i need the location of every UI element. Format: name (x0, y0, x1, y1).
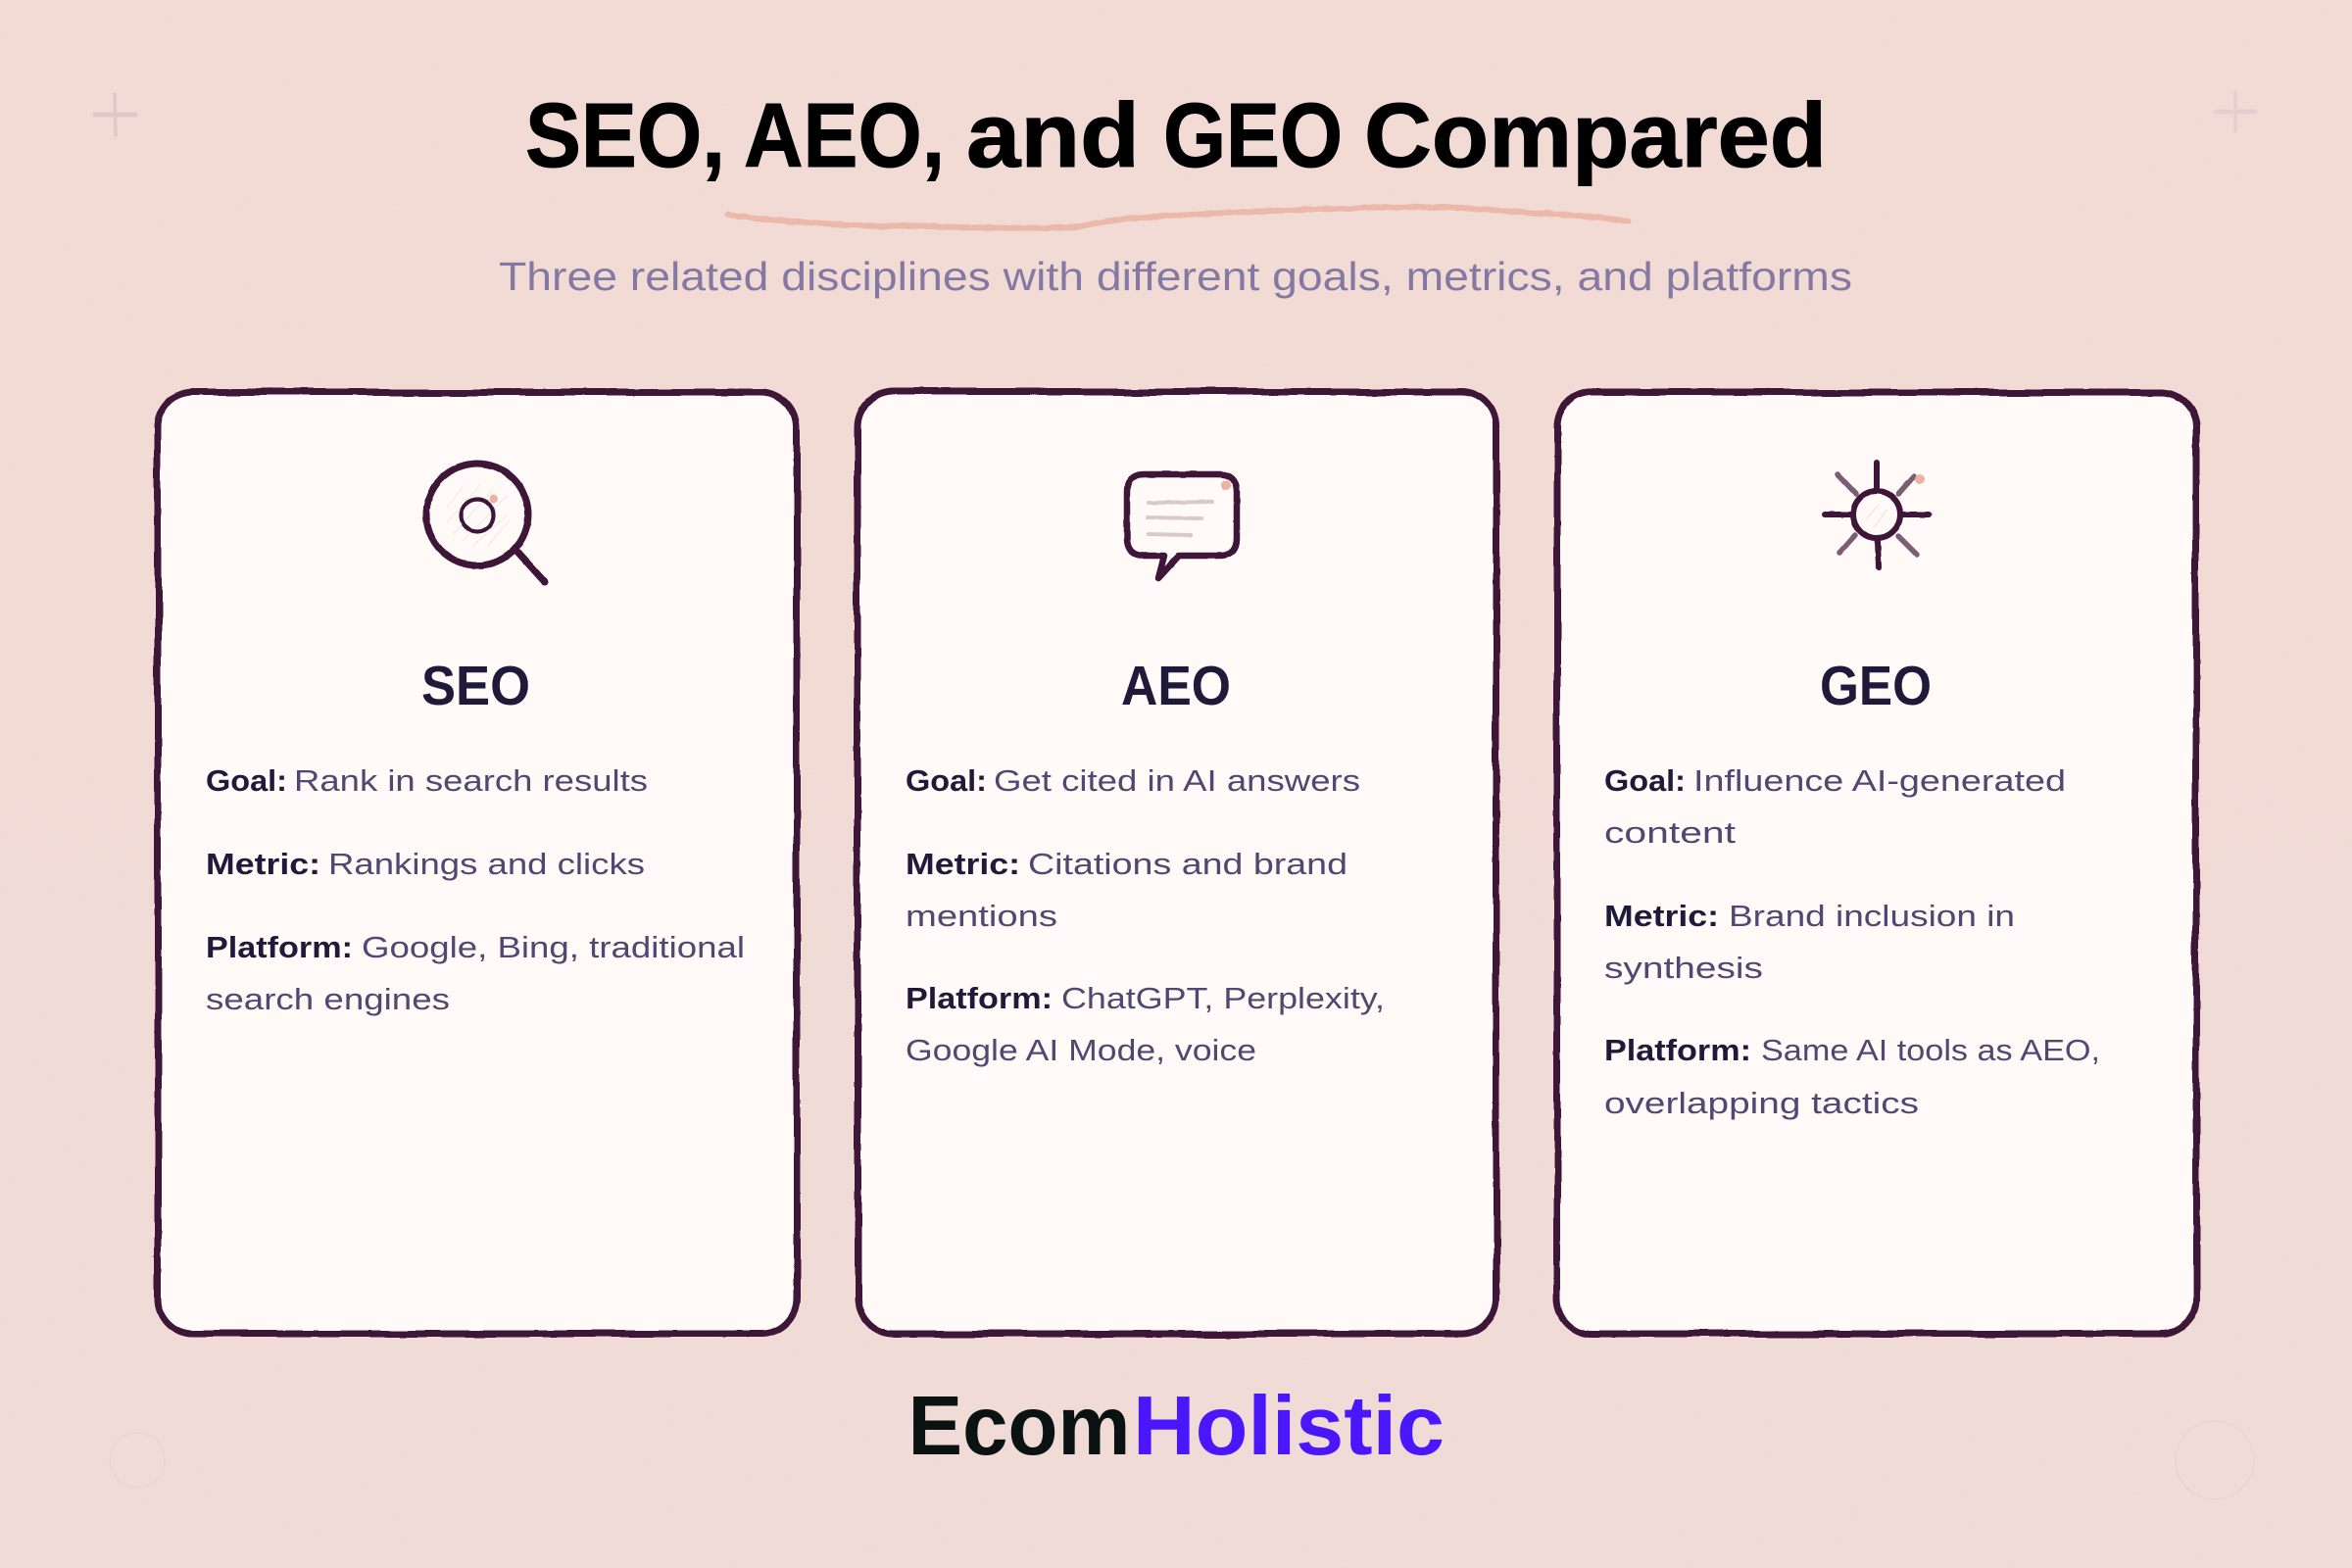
metric: SEO: Rankings and clicks (328, 847, 645, 881)
card outline: GEO (1557, 392, 2196, 1334)
metric: GEO (1604, 899, 2015, 985)
platform: AEO (906, 981, 1385, 1067)
goal: SEO: Goal: (206, 763, 287, 798)
goal: GEO: Influence AI-generated (1693, 763, 2066, 798)
goal: GEO: content (1604, 815, 1736, 850)
metric: AEO (906, 847, 1348, 933)
card outline: AEO (858, 392, 1496, 1334)
title: and (966, 84, 1140, 186)
decoration: plus top left (95, 94, 135, 135)
metric: GEO: synthesis (1604, 951, 1763, 985)
brand logo: Holistic (1133, 1380, 1445, 1473)
goal: AEO: Get cited in AI answers (994, 763, 1360, 798)
icon: sun (1825, 463, 1929, 567)
platform: SEO: Google, Bing, traditional (362, 930, 745, 964)
decoration: circle bottom right (2176, 1421, 2254, 1499)
platform: AEO: ChatGPT, Perplexity, (1061, 981, 1385, 1015)
metric: AEO: Metric: (906, 847, 1020, 881)
heading: AEO: AEO (1121, 655, 1231, 717)
goal: GEO (1604, 763, 2066, 850)
brand logo: Ecom (907, 1380, 1131, 1473)
title: SEO, (525, 84, 725, 186)
platform: GEO: Platform: (1604, 1033, 1751, 1067)
metric: SEO: Metric: (206, 847, 320, 881)
goal: GEO: Goal: (1604, 763, 1686, 798)
metric: AEO: mentions (906, 899, 1057, 933)
goal: AEO: Goal: (906, 763, 987, 798)
card outline: SEO (158, 392, 797, 1334)
title underline (728, 207, 1629, 228)
panel: SEO (158, 392, 797, 1334)
platform: AEO: Platform: (906, 981, 1053, 1015)
icon: speech bubble (1127, 474, 1237, 578)
platform: GEO: Same AI tools as AEO, (1761, 1033, 2100, 1067)
platform: GEO (1604, 1033, 2100, 1120)
platform: SEO: search engines (206, 982, 450, 1016)
platform: GEO: overlapping tactics (1604, 1086, 1919, 1120)
decoration: plus top right (2216, 92, 2255, 131)
subtitle: Three related disciplines with different goals, metrics, and platforms (499, 254, 1852, 299)
metric: GEO: Brand inclusion in (1729, 899, 2015, 933)
title: Compared (1364, 84, 1827, 186)
heading: SEO: SEO (421, 655, 530, 717)
platform: SEO (206, 930, 745, 1016)
goal: SEO: Rank in search results (294, 763, 648, 798)
panel: GEO (1557, 392, 2196, 1334)
metric: GEO: Metric: (1604, 899, 1719, 933)
icon: magnifying glass (426, 464, 545, 582)
title: AEO, (744, 84, 945, 186)
platform: AEO: Google AI Mode, voice (906, 1033, 1256, 1067)
metric: AEO: Citations and brand (1028, 847, 1348, 881)
heading: GEO: GEO (1820, 655, 1932, 717)
title: GEO (1163, 84, 1343, 186)
platform: SEO: Platform: (206, 930, 353, 964)
decoration: circle bottom left (110, 1433, 165, 1488)
panel: AEO (858, 392, 1496, 1334)
